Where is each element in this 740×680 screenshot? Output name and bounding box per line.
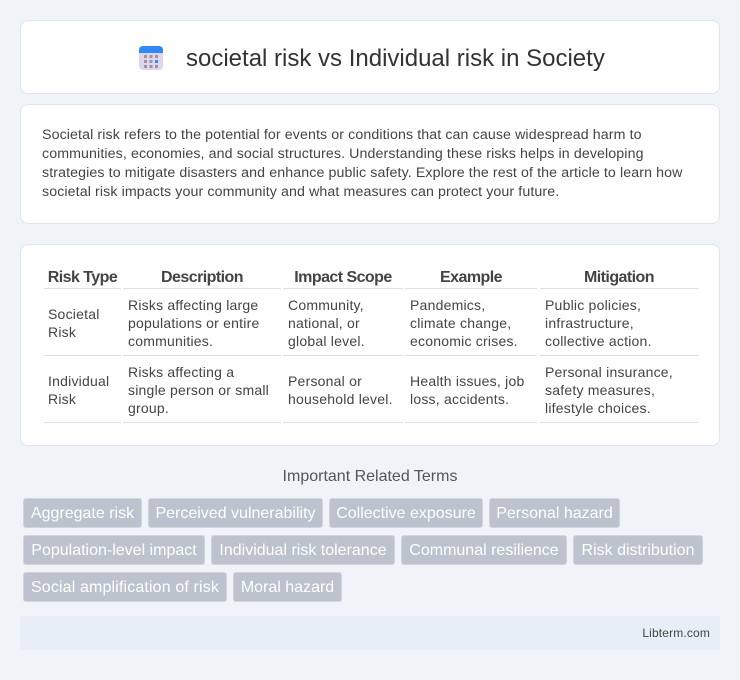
tag: Moral hazard — [241, 579, 334, 596]
table row: individual risk: Risks affecting a — [128, 364, 234, 380]
header panel — [20, 20, 720, 94]
table row: individual risk: group. — [128, 400, 169, 416]
tag: Collective exposure — [336, 505, 476, 522]
table row: societal risk: Societal — [48, 306, 100, 322]
title: societal risk vs Individual risk in Society — [186, 45, 605, 72]
tag: Communal resilience — [409, 542, 559, 559]
table row: societal risk: economic crises. — [410, 333, 518, 349]
table row: societal risk: communities. — [128, 333, 213, 349]
table row: societal risk: collective action. — [545, 333, 652, 349]
tag — [23, 498, 142, 528]
intro text — [42, 126, 682, 200]
table row: societal risk: populations or entire — [128, 315, 259, 331]
panel: introduction — [20, 104, 720, 224]
tag — [329, 498, 483, 528]
tag: Population-level impact — [31, 542, 197, 559]
tag list — [23, 498, 703, 602]
tag — [211, 535, 395, 565]
tag: Perceived vulnerability — [155, 505, 316, 522]
table row: societal risk: Pandemics, — [410, 297, 485, 313]
table row: individual risk: Risk — [48, 391, 76, 407]
table header: Risk Type — [48, 269, 117, 286]
table row: individual risk: household level. — [288, 391, 393, 407]
tag: Social amplification of risk — [31, 579, 219, 596]
table row: societal risk: national, or — [288, 315, 360, 331]
heading: related terms: Important Related Terms — [283, 468, 457, 485]
table row: individual risk: loss, accidents. — [410, 391, 509, 407]
table row: societal risk: climate change, — [410, 315, 511, 331]
table header — [48, 269, 654, 286]
table row: societal risk: global level. — [288, 333, 365, 349]
icon: calendar grid — [139, 46, 163, 70]
table row: individual risk: single person or small — [128, 382, 269, 398]
table row: individual risk: safety measures, — [545, 382, 655, 398]
intro text: Societal risk refers to the potential for events or conditions that can cause widespread harm to — [42, 126, 642, 142]
panel: comparison table — [20, 244, 720, 446]
intro text: strategies to mitigate disasters and enhance public safety. Explore the rest of the article to learn how — [42, 165, 682, 181]
footer bar — [20, 616, 720, 650]
tag — [23, 535, 205, 565]
table row: societal risk: Community, — [288, 297, 364, 313]
intro text: communities, economies, and social structures. Understanding these risks helps in developing — [42, 146, 644, 162]
table row: individual risk — [48, 364, 673, 416]
tag — [148, 498, 323, 528]
tag — [489, 498, 620, 528]
tag: Personal hazard — [496, 505, 613, 522]
tag — [233, 572, 342, 602]
table row: individual risk: Health issues, job — [410, 373, 524, 389]
table row: individual risk: Individual — [48, 373, 109, 389]
tag: Aggregate risk — [31, 505, 134, 522]
table row: societal risk: Public policies, — [545, 297, 641, 313]
tag: Risk distribution — [582, 542, 694, 559]
tag — [23, 572, 227, 602]
tag — [401, 535, 567, 565]
table header: Description — [161, 269, 243, 286]
tag — [573, 535, 703, 565]
table row: societal risk: Risk — [48, 324, 76, 340]
table header: Example — [440, 269, 502, 286]
table row: societal risk: Risks affecting large — [128, 297, 258, 313]
table row: individual risk: Personal or — [288, 373, 362, 389]
table header: Mitigation — [584, 269, 654, 286]
intro text: societal risk impacts your community and what measures can protect your future. — [42, 184, 559, 200]
tag: Individual risk tolerance — [219, 542, 387, 559]
table row: individual risk: Personal insurance, — [545, 364, 673, 380]
table row: societal risk — [48, 297, 652, 349]
table header: Impact Scope — [294, 269, 392, 286]
table row: societal risk: infrastructure, — [545, 315, 634, 331]
footer credit: Libterm.com — [642, 626, 710, 640]
table row: individual risk: lifestyle choices. — [545, 400, 651, 416]
